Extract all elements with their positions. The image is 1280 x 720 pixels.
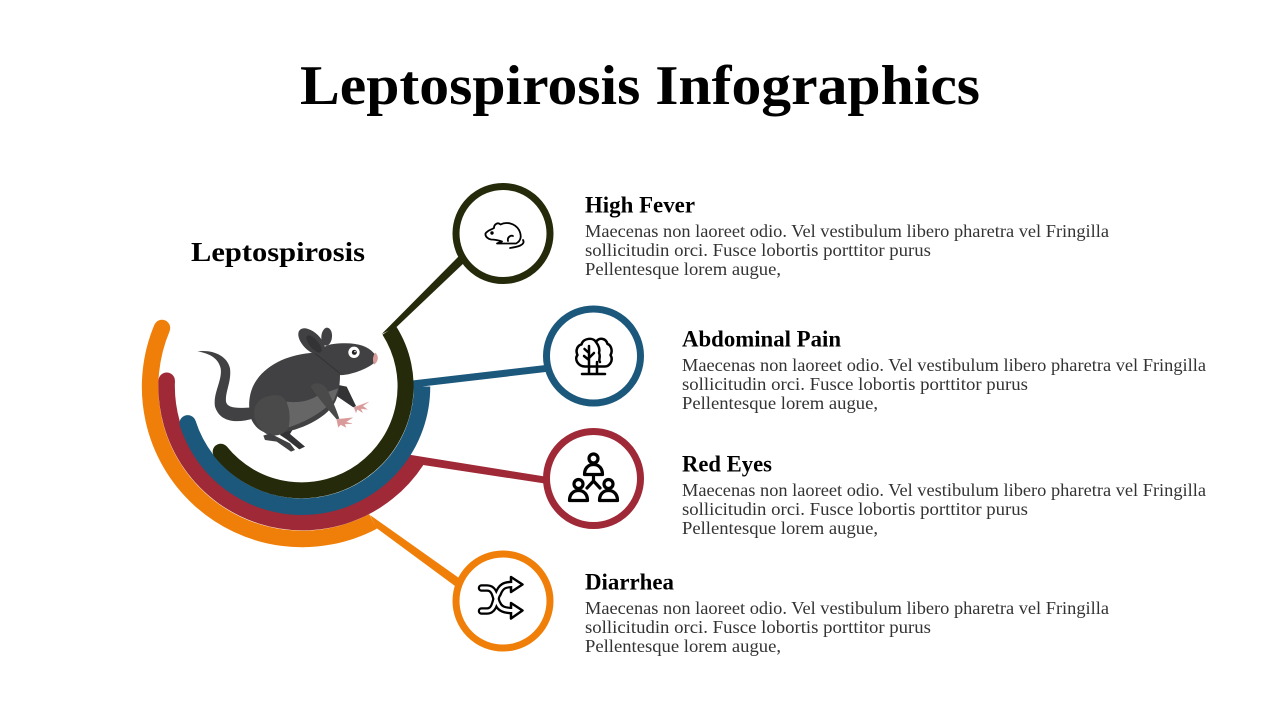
thigh	[254, 395, 290, 436]
text block: Abdominal Pain: Pellentesque lorem augue,	[682, 393, 878, 413]
text block: Abdominal Pain: sollicitudin orci. Fusce lobortis porttitor purus	[682, 374, 1028, 394]
body	[249, 343, 378, 434]
node 3: people icon circle	[546, 432, 640, 526]
icon: people	[570, 454, 618, 500]
text block: High Fever: Maecenas non laoreet odio. Vel vestibulum libero pharetra vel Fringilla	[585, 221, 1109, 241]
text block: Red Eyes: sollicitudin orci. Fusce lobortis porttitor purus	[682, 499, 1028, 519]
belly	[287, 388, 338, 427]
paws	[337, 418, 353, 427]
icon: mouse	[485, 223, 524, 248]
icon: trees	[576, 339, 612, 374]
text block: Diarrhea: Pellentesque lorem augue,	[585, 636, 781, 656]
red arc and connector	[158, 372, 548, 522]
neck fold	[315, 353, 340, 373]
blue arc and connector	[180, 364, 550, 507]
node 2: tree icon circle	[546, 309, 640, 403]
text block: High Fever	[585, 192, 1109, 279]
icon: shuffle arrows	[482, 577, 522, 618]
eye	[348, 347, 360, 358]
text block: Diarrhea: sollicitudin orci. Fusce lobortis porttitor purus	[585, 617, 931, 637]
tail	[197, 351, 253, 421]
text block: Abdominal Pain	[682, 326, 1206, 413]
text block: High Fever: High Fever	[585, 192, 695, 218]
text block: High Fever: sollicitudin orci. Fusce lobortis porttitor purus	[585, 240, 931, 260]
text block: High Fever: Pellentesque lorem augue,	[585, 259, 781, 279]
title: Leptospirosis Infographics	[300, 55, 980, 117]
text block: Red Eyes: Pellentesque lorem augue,	[682, 518, 878, 538]
text block: Diarrhea: Diarrhea	[585, 570, 674, 594]
rat illustration	[197, 324, 378, 452]
text block: Diarrhea: Maecenas non laoreet odio. Vel vestibulum libero pharetra vel Fringilla	[585, 598, 1109, 618]
far legs	[337, 385, 356, 407]
dark arc and connector	[213, 255, 466, 490]
front ear	[294, 324, 330, 360]
node 1: rat icon circle	[456, 186, 550, 280]
nose	[373, 353, 378, 365]
text block: Abdominal Pain: Abdominal Pain	[682, 326, 841, 352]
text block: Red Eyes: Red Eyes	[682, 452, 772, 476]
text block: Red Eyes	[682, 452, 1206, 538]
inner ear	[304, 333, 324, 355]
orange arc and connector	[150, 320, 459, 586]
center label: Leptospirosis	[191, 237, 365, 267]
text block: Red Eyes: Maecenas non laoreet odio. Vel vestibulum libero pharetra vel Fringilla	[682, 480, 1206, 500]
text block: Abdominal Pain: Maecenas non laoreet odio. Vel vestibulum libero pharetra vel Fringilla	[682, 355, 1206, 375]
node 4: shuffle icon circle	[456, 554, 550, 648]
foreleg	[311, 383, 339, 419]
back ear	[321, 327, 333, 346]
text block: Diarrhea	[585, 570, 1109, 656]
near foot	[263, 433, 295, 452]
